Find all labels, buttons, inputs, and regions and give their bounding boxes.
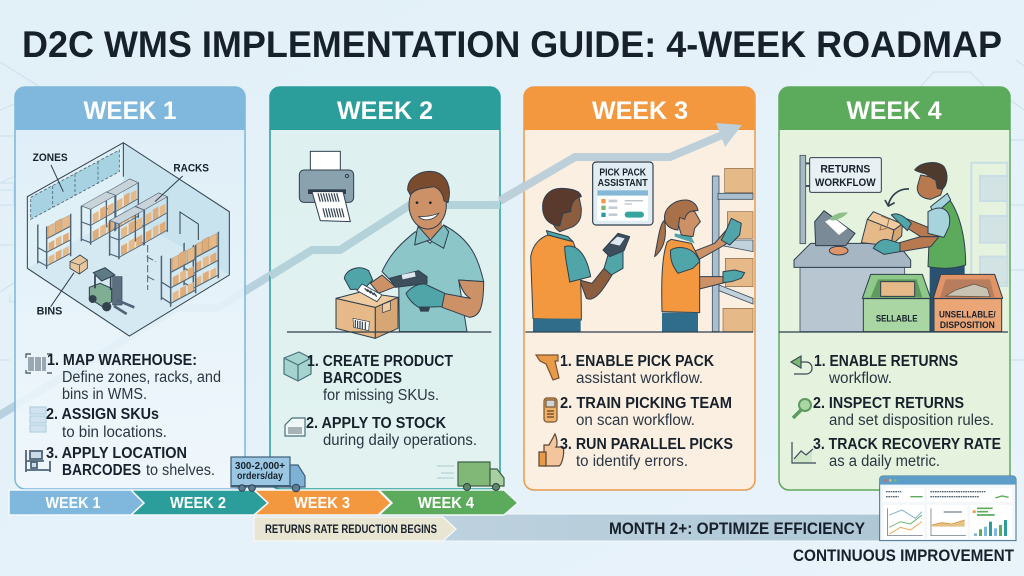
text: week 3 steps: on scan workflow. <box>576 412 695 429</box>
text: week 1 steps: 1. MAP WAREHOUSE: <box>47 352 197 369</box>
week 2 chevron <box>131 490 268 515</box>
week 1 chevron: WEEK 1 <box>46 495 101 512</box>
icon: handheld terminal <box>544 398 557 422</box>
background warehouse wireframe <box>0 60 1024 360</box>
panel 3 header <box>524 87 755 130</box>
panel: week 2 <box>270 87 500 489</box>
returns station illustration <box>779 155 1008 332</box>
man with scanner <box>531 188 630 332</box>
label: racks: RACKS <box>173 163 209 175</box>
text: week 1 steps <box>46 352 221 479</box>
icon: return arrow <box>791 356 812 374</box>
text: week 2 steps: BARCODES <box>323 370 402 387</box>
panel: week 1 <box>15 87 245 489</box>
week 2 chevron: WEEK 2 <box>170 495 226 512</box>
text: week 4 steps: and set disposition rules. <box>829 412 994 429</box>
woman picking <box>655 200 745 332</box>
box with label <box>336 284 398 338</box>
week 3 chevron: WEEK 3 <box>294 495 350 512</box>
text: week 3 steps: assistant workflow. <box>576 370 703 387</box>
panel: week 4 <box>779 87 1010 490</box>
heading: week 1: WEEK 1 <box>84 97 177 125</box>
text: week 1 steps: to bin locations. <box>62 424 167 441</box>
KPI row <box>884 488 1012 502</box>
text: week 2 steps: during daily operations. <box>323 432 477 449</box>
blue truck: orders per day <box>231 457 305 492</box>
panel 1 header <box>15 87 245 130</box>
panel 2 header <box>270 87 500 130</box>
heading: week 2: WEEK 2 <box>337 97 433 125</box>
green bin: sellable <box>862 274 931 332</box>
heading: week 4: WEEK 4 <box>846 97 942 125</box>
text: week 4 steps: workflow. <box>828 370 892 387</box>
sign: ASSISTANT <box>598 178 648 189</box>
orange bin: unsellable: DISPOSITION <box>940 320 995 330</box>
icon: barcode label <box>285 418 305 436</box>
text: week 2 steps: 1. CREATE PRODUCT <box>307 353 453 370</box>
icon: line chart <box>792 442 816 463</box>
text: week 2 steps: for missing SKUs. <box>323 387 439 404</box>
text: week 3 steps: 3. RUN PARALLEL PICKS <box>560 436 733 453</box>
faint wall <box>971 163 1007 286</box>
panel: week 3 <box>500 87 755 490</box>
text: week 4 steps: as a daily metric. <box>829 453 940 470</box>
returns workflow sign: RETURNS <box>820 164 871 176</box>
sign: PICK PACK <box>599 168 646 179</box>
text: week 1 steps: 2. ASSIGN SKUs <box>46 406 159 423</box>
text: week 1 steps: 3. APPLY LOCATION <box>46 445 187 462</box>
week 1 chevron <box>9 490 144 515</box>
bar chart <box>970 505 1012 538</box>
man <box>897 163 966 332</box>
warehouse illustration <box>27 143 229 336</box>
dashboard <box>880 476 1016 541</box>
returns workflow sign: WORKFLOW <box>815 177 876 189</box>
text: week 3 steps: 1. ENABLE PICK PACK <box>560 353 714 370</box>
label: zones: ZONES <box>33 152 68 164</box>
orange bin: unsellable <box>933 274 1003 332</box>
returns workflow sign <box>810 158 881 192</box>
panel 4 header <box>779 87 1010 130</box>
text: week 3 steps: 2. TRAIN PICKING TEAM <box>560 395 732 412</box>
week 4 chevron <box>379 490 518 515</box>
week 3 chevron <box>254 490 391 515</box>
icon: shelf <box>26 450 50 472</box>
text: week 1 steps: BARCODES <box>62 462 141 479</box>
shelving <box>712 168 753 332</box>
package <box>861 212 902 246</box>
text: week 1 steps: to shelves. <box>146 462 215 479</box>
icon: product box <box>284 352 311 381</box>
text: week 3 steps: to identify errors. <box>576 453 688 470</box>
icon: barcode scan <box>26 354 52 373</box>
returns rate reduction chevron: RETURNS RATE REDUCTION BEGINS <box>265 524 437 536</box>
panel 2 body <box>270 87 500 489</box>
green bin: sellable: SELLABLE <box>876 314 917 324</box>
area chart <box>927 505 968 538</box>
printer and worker illustration <box>287 151 491 338</box>
label: bins: BINS <box>37 305 63 317</box>
month 2 label: MONTH 2+: OPTIMIZE EFFICIENCY <box>609 519 866 538</box>
icon: bins list <box>30 407 46 432</box>
heading: week 3: WEEK 3 <box>592 97 688 125</box>
text: week 3 steps <box>560 353 733 470</box>
forklift <box>89 268 134 314</box>
sign <box>593 162 653 225</box>
panel 3 body <box>524 87 755 490</box>
text: week 4 steps <box>813 353 1001 470</box>
week 4 chevron: WEEK 4 <box>418 495 474 512</box>
text: week 4 steps: 2. INSPECT RETURNS <box>813 395 964 412</box>
text: week 1 steps: Define zones, racks, and <box>62 369 221 386</box>
line chart <box>884 505 924 538</box>
timeline chevrons <box>9 490 518 515</box>
green truck <box>437 462 504 490</box>
orange bin: unsellable: UNSELLABLE/ <box>939 309 996 319</box>
arrow with head <box>500 123 742 201</box>
icon: magnifier <box>793 399 811 418</box>
worker <box>344 171 484 332</box>
returns rate reduction chevron <box>254 517 456 541</box>
blue truck: orders per day: 300-2,000+ <box>235 461 285 472</box>
text: week 1 steps: bins in WMS. <box>62 386 147 403</box>
title: D2C WMS IMPLEMENTATION GUIDE: 4-WEEK ROADMAP <box>22 24 1002 65</box>
icon: barcode gun <box>536 355 559 380</box>
panel 4 body <box>779 87 1010 490</box>
text: week 4 steps: 1. ENABLE RETURNS <box>814 353 958 370</box>
text: week 2 steps: 2. APPLY TO STOCK <box>306 415 446 432</box>
text: week 4 steps: 3. TRACK RECOVERY RATE <box>813 436 1001 453</box>
icon: thumbs up <box>539 434 564 466</box>
growth arrow <box>0 133 727 418</box>
blue truck: orders per day: orders/day <box>237 471 283 482</box>
month 2 band <box>254 514 894 541</box>
panel 1 body <box>15 87 245 489</box>
pickers illustration <box>525 162 753 332</box>
text: week 2 steps <box>306 353 477 449</box>
arrow segment over panel 2 <box>270 205 500 276</box>
